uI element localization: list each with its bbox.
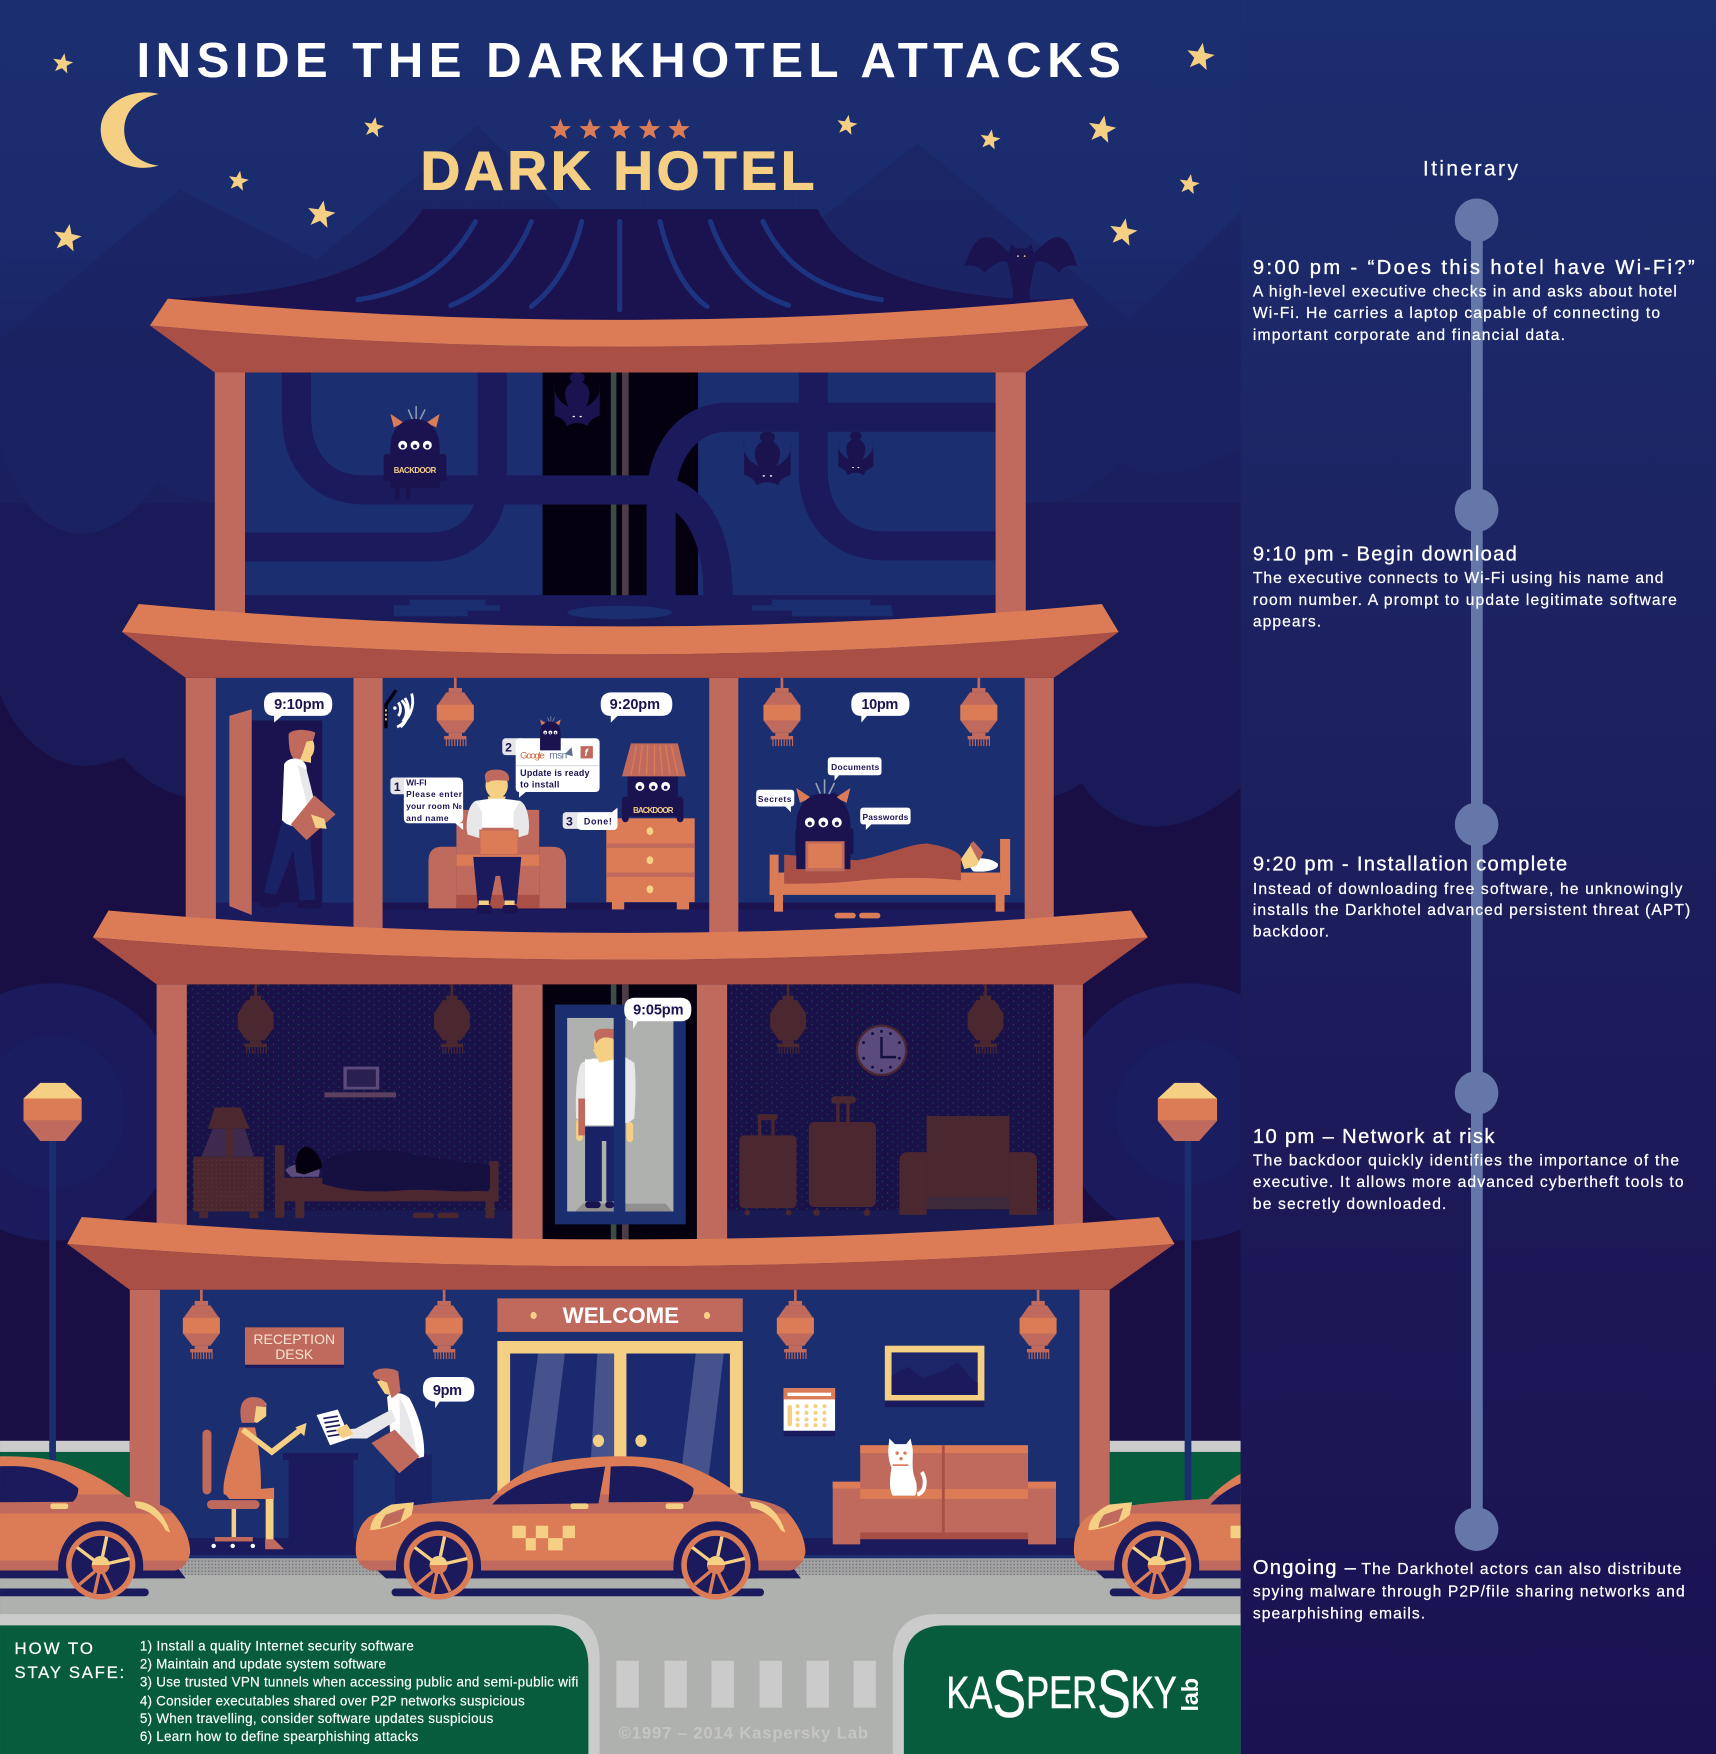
speech bubble Secrets (756, 790, 794, 812)
door with man, 9:10pm (229, 692, 336, 915)
lanterns floor 3 (238, 984, 1003, 1054)
itinerary item ongoing: spearphishing emails. (1253, 1606, 1425, 1623)
right green panel with logo (893, 1614, 1241, 1754)
speech bubble Passwords: Passwords (862, 812, 909, 822)
Kaspersky Lab logo: KA (946, 1666, 1008, 1718)
safety tips list: 6) Learn how to define spearphishing attacks (140, 1729, 419, 1744)
calendar (784, 1388, 835, 1436)
speech bubble 10pm: 10pm (861, 697, 898, 713)
monster under lamp: BACKDOOR (633, 806, 674, 815)
reception desk (283, 1453, 358, 1549)
crosswalk (616, 1661, 876, 1708)
fourth eave (67, 1217, 1175, 1290)
posts (215, 373, 1026, 619)
bubble 2 update prompt: msn (549, 750, 567, 761)
dim bed with sleeper (275, 1145, 499, 1218)
third floor dark rooms (157, 984, 1083, 1242)
bubble 2 update prompt: Google (520, 750, 545, 761)
itinerary heading: Itinerary (1423, 157, 1518, 181)
monster under lamp (622, 743, 686, 822)
bubble 1 WiFi prompt: WI-FI (406, 777, 427, 787)
speech bubble 9pm (423, 1377, 474, 1408)
Kaspersky Lab logo: lab (1177, 1678, 1203, 1711)
reception desk sign: RECEPTION (253, 1331, 335, 1347)
wifi router (386, 690, 413, 728)
how to stay safe heading: STAY SAFE: (15, 1663, 124, 1682)
reception desk sign (245, 1327, 344, 1368)
luggage (739, 1096, 876, 1216)
skirting shadow (383, 903, 1025, 909)
safety tips list: 3) Use trusted VPN tunnels when accessing public and semi-public wifi (140, 1674, 578, 1689)
bubble 3 done (563, 808, 617, 830)
elevator shaft top (543, 373, 698, 596)
bubble 3 done: 3 (566, 815, 573, 829)
speech bubble 9:05pm: 9:05pm (633, 1003, 684, 1019)
elevator door strip (614, 1005, 625, 1224)
itinerary item 9:10 pm: 9:10 pm - Begin download (1253, 543, 1517, 565)
bubble 2 update prompt (502, 716, 600, 798)
how to stay safe heading (15, 1639, 124, 1682)
speech bubble 9pm: 9pm (433, 1383, 462, 1399)
itinerary item ongoing: spying malware through P2P/file sharing networks and (1253, 1583, 1685, 1600)
itinerary item 9:00 pm: Wi-Fi. He carries a laptop capable of connecting to (1253, 305, 1660, 322)
itinerary item 10 pm: 10 pm – Network at risk (1253, 1126, 1495, 1148)
speech bubble Documents: Documents (831, 762, 880, 772)
dim laptop on shelf (324, 1067, 396, 1097)
itinerary item 10 pm (1253, 1126, 1684, 1213)
itinerary item 9:10 pm: appears. (1253, 613, 1321, 630)
ground floor lobby (130, 1290, 1110, 1558)
bubble 2 update prompt: f (584, 748, 589, 759)
lucky cat (888, 1439, 925, 1496)
itinerary item 9:10 pm (1253, 543, 1677, 630)
framed picture (885, 1346, 984, 1407)
itinerary item 9:00 pm (1253, 257, 1695, 344)
itinerary item 9:10 pm: room number. A prompt to update legitimate software (1253, 592, 1677, 609)
itinerary item 9:20 pm: backdoor. (1253, 923, 1329, 940)
Kaspersky Lab logo: KY (1131, 1666, 1177, 1718)
bubble 3 done: Done! (584, 816, 612, 826)
speech bubble 9:10pm: 9:10pm (274, 697, 324, 713)
bubble 2 update prompt: to install (520, 780, 559, 790)
itinerary item 9:20 pm: 9:20 pm - Installation complete (1253, 853, 1567, 875)
top eave (150, 299, 1088, 373)
floor strip (245, 595, 996, 617)
second floor rooms (186, 677, 1054, 936)
armchair with man (428, 770, 566, 914)
itinerary item ongoing (1253, 1557, 1685, 1623)
safety tips list: 2) Maintain and update system software (140, 1656, 386, 1671)
bat on roof (964, 237, 1077, 304)
speech bubble 9:20pm: 9:20pm (610, 697, 660, 713)
eaves of each floor (67, 299, 1175, 1290)
bubble 1 WiFi prompt: your room № (406, 801, 463, 811)
third eave (93, 911, 1148, 984)
hotel sign: Dark Hotel: DARK HOTEL (421, 140, 814, 202)
itinerary item 9:00 pm: important corporate and financial data. (1253, 327, 1565, 344)
bubble 1 WiFi prompt: and name (406, 813, 449, 823)
bubble 2 update prompt: 2 (505, 741, 512, 755)
Kaspersky Lab logo: PER (1026, 1666, 1097, 1718)
speech bubble 9:20pm (601, 692, 672, 723)
itinerary item 9:20 pm (1253, 853, 1690, 940)
dim slippers (413, 1213, 459, 1218)
dark floor (187, 1210, 1054, 1242)
stars (51, 40, 1216, 252)
road and pavement (0, 1441, 1241, 1754)
moon (101, 92, 159, 168)
monster BACKDOOR on pipe: BACKDOOR (394, 466, 437, 475)
Kaspersky Lab logo: S (1097, 1657, 1131, 1732)
dim armchair (899, 1116, 1037, 1215)
executive checking in (317, 1368, 474, 1505)
speech bubble Documents (828, 757, 881, 781)
receptionist woman on chair (207, 1397, 307, 1549)
itinerary item 9:20 pm: installs the Darkhotel advanced persistent threat (APT) (1253, 902, 1690, 919)
posts ground floor (130, 1290, 1110, 1558)
street lamps (24, 1083, 1217, 1510)
monster BACKDOOR on pipe (384, 406, 446, 498)
itinerary item ongoing: The Darkhotel actors can also distribute (1361, 1561, 1682, 1578)
safety tips list: 1) Install a quality Internet security software (140, 1639, 414, 1654)
five star rating (550, 119, 690, 139)
speech bubble 10pm (851, 692, 909, 723)
timeline (1455, 199, 1498, 1551)
reception desk sign: DESK (275, 1346, 314, 1362)
title: INSIDE THE DARKHOTEL ATTACKS (136, 33, 1121, 88)
safety tips list: 4) Consider executables shared over P2P networks suspicious (140, 1693, 525, 1708)
bubble 2 update prompt: Update is ready (520, 768, 590, 778)
itinerary item ongoing: Ongoing – (1253, 1557, 1357, 1579)
copyright: ©1997 – 2014 Kaspersky Lab (619, 1723, 868, 1742)
itinerary item 9:00 pm: 9:00 pm - “Does this hotel have Wi-Fi?” (1253, 257, 1695, 279)
sofa (833, 1445, 1056, 1545)
night sky background (0, 0, 1317, 1754)
right itinerary panel background (1241, 0, 1716, 1754)
safety tips list: 5) When travelling, consider software updates suspicious (140, 1711, 494, 1726)
lanterns floor 2 (437, 677, 997, 746)
safety tips list (140, 1639, 578, 1744)
pipes (245, 373, 996, 604)
Kaspersky Lab logo: S (992, 1657, 1026, 1732)
itinerary item 9:20 pm: Instead of downloading free software, he unknowingly (1253, 881, 1683, 898)
lobby floor (160, 1538, 1079, 1555)
Kaspersky Lab logo (946, 1657, 1203, 1732)
man in elevator (576, 1029, 614, 1208)
posts floor 3 (157, 984, 1083, 1242)
itinerary item 10 pm: be secretly downloaded. (1253, 1196, 1446, 1213)
bubble 1 WiFi prompt: Please enter (406, 789, 463, 799)
speech bubble 9:10pm (264, 692, 332, 723)
posts floor 2 (186, 678, 1054, 935)
bubble 1 WiFi prompt: 1 (394, 780, 401, 794)
welcome sign (497, 1298, 743, 1332)
speech bubble 9:05pm (624, 998, 691, 1029)
floor (216, 903, 1025, 936)
itinerary item 10 pm: executive. It allows more advanced cybertheft tools to (1253, 1174, 1684, 1191)
hanging bats (554, 373, 874, 485)
wall clock (857, 1026, 906, 1075)
elevator shaft (543, 984, 697, 1242)
itinerary item 10 pm: The backdoor quickly identifies the importance of the (1253, 1153, 1679, 1170)
left safety panel (0, 1614, 600, 1754)
puddles (394, 600, 893, 619)
itinerary item 9:10 pm: The executive connects to Wi-Fi using his name and (1253, 570, 1663, 587)
dim lamp and nightstand (194, 1107, 264, 1218)
speech bubble Secrets: Secrets (758, 794, 792, 804)
dresser (606, 818, 695, 909)
entrance doors (497, 1341, 743, 1499)
slippers (835, 913, 880, 918)
second eave (122, 604, 1119, 678)
speech bubble Passwords (860, 808, 911, 830)
lanterns ground floor (183, 1290, 1057, 1359)
bed with sleeping executive and monster (770, 779, 1010, 912)
itinerary item 9:00 pm: A high-level executive checks in and asks about hotel (1253, 283, 1677, 300)
taxi cars (0, 1456, 1241, 1600)
welcome sign: WELCOME (563, 1303, 679, 1328)
how to stay safe heading: HOW TO (15, 1639, 93, 1658)
top floor: attic with pipes (215, 373, 1026, 619)
pagoda roof (168, 209, 1073, 324)
bubble 1 WiFi prompt (390, 777, 463, 830)
